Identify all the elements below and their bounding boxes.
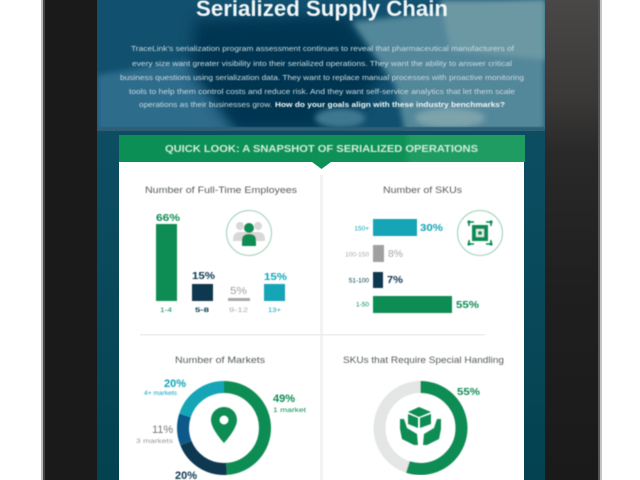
intro paragraph: TraceLink's serialization program assessment continues to reveal that pharmaceutical manufacturers of [131,44,515,53]
donut chart: special handling [380,387,462,469]
heading: employees: Number of Full-Time Employees [145,185,298,195]
donut chart: markets [183,387,265,469]
bar chart: SKUs: 100-150 [345,252,369,258]
bar chart: employees: 13+ [268,307,281,314]
label: 1 market: 1 market [273,407,306,414]
bar chart: SKUs: 7% [387,275,403,286]
intro paragraph [120,44,524,109]
label: 3 markets: 3 markets [136,438,174,445]
intro paragraph: tools to help them control costs and reduce risk. And they want self-service analytics that let them scale [129,87,515,96]
bar chart: SKUs: 55% [456,300,479,311]
label: 4+ markets: 4+ markets [144,390,178,397]
intro paragraph: How do your goals align with these industry benchmarks? [275,100,505,109]
bar chart: employees: 9-12 [229,307,249,314]
bar chart: employees: 5-8 [195,307,210,314]
panel: employees [145,185,298,314]
bar chart: employees: 66% [156,213,180,224]
bar chart: employees: 15% [264,272,287,283]
panel: special handling [343,355,504,469]
heading: markets: Number of Markets [175,355,266,365]
bar chart: employees [156,213,287,314]
bar chart: SKUs: 30% [420,223,443,234]
hero photo background [97,0,545,480]
icon: hands holding box [400,407,441,445]
label: 4+ markets: 20% [164,378,186,390]
section banner: QUICK LOOK: A SNAPSHOT OF SERIALIZED OPERATIONS [165,143,478,155]
icon: people [226,210,272,256]
bar chart: SKUs: 150+ [354,226,369,232]
bar chart: employees: 5% [230,286,247,297]
label: 1 market [273,393,306,414]
icon: map pin [211,407,237,443]
intro paragraph: operations as their businesses grow. [139,100,272,109]
panel: markets [136,355,306,480]
bar chart: SKUs: 8% [388,249,403,260]
label: 55%: 55% [457,387,480,398]
bar chart: SKUs: 51-100 [349,278,369,284]
heading: SKUs: Number of SKUs [383,185,463,195]
label: 1 market: 49% [273,393,295,405]
bar chart: SKUs [345,219,479,313]
intro paragraph: every size want greater visibility into their serialized operations. They want the ability to answer critical [132,59,512,68]
label: 3 markets [136,424,174,445]
white content panel [119,162,524,480]
label: 4+ markets [144,378,186,397]
heading: special handling: SKUs that Require Special Handling [343,355,504,365]
label: 3 markets: 11% [152,424,173,436]
intro paragraph: business questions using serialization data. They want to replace manual processes with proactive monitoring [120,73,524,82]
bar chart: employees: 1-4 [160,307,172,314]
bar chart: employees: 15% [192,271,215,282]
panel: SKUs [345,185,502,313]
bar chart: SKUs: 1-50 [356,302,369,308]
icon: scanner code [458,210,502,256]
section banner [119,135,525,169]
